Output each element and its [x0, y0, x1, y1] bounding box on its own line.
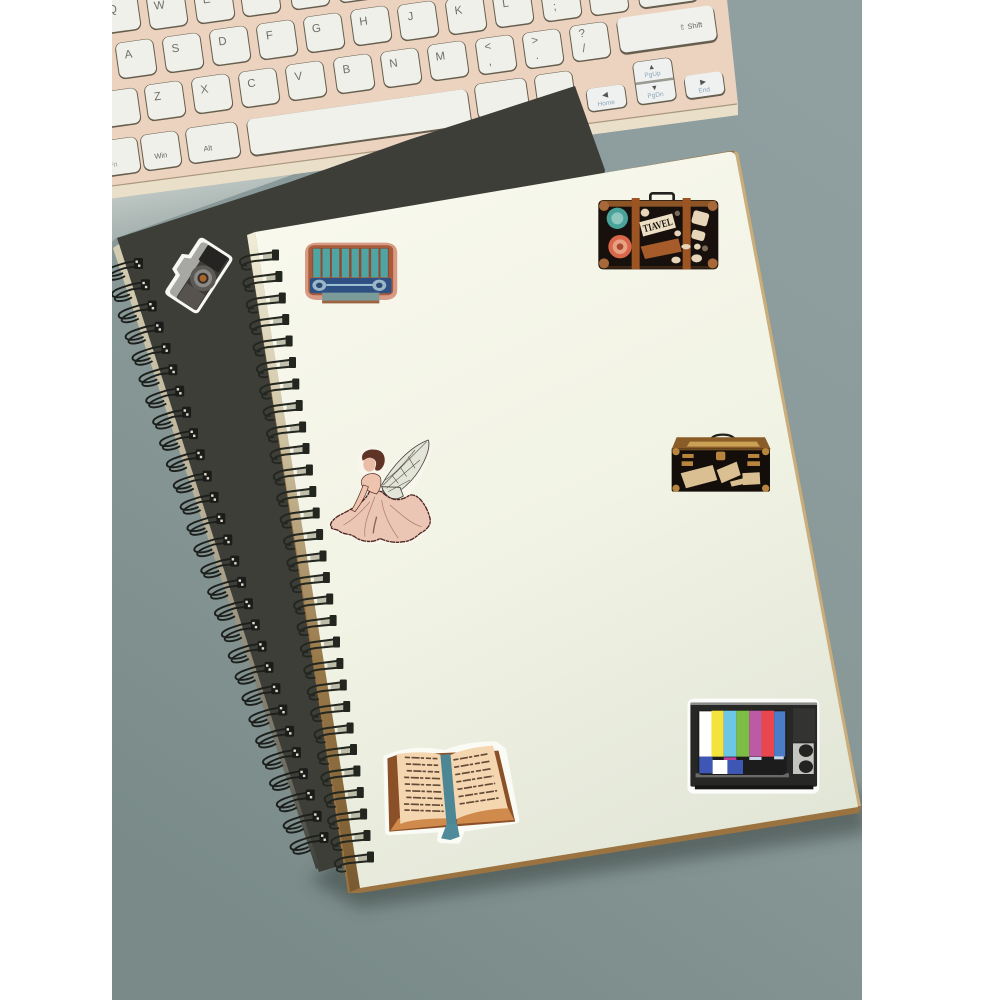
key row Z to slash: M: [435, 50, 446, 64]
key row A to L: S: [171, 42, 180, 55]
key row Z to slash: >: [531, 35, 539, 47]
tv speaker and knobs: [793, 708, 815, 774]
right spiral binding: [240, 250, 374, 872]
arrow keys: Home: [597, 99, 616, 108]
shadow under notebooks: [310, 790, 870, 908]
key row Z to slash: ?: [578, 28, 586, 40]
bottom key row: Fn: [108, 159, 118, 170]
dark back notebook: [105, 86, 605, 872]
book pages: [397, 752, 447, 824]
key row Z to slash: <: [484, 41, 492, 53]
fairy head and hair: [363, 457, 375, 472]
key row Z to slash: N: [389, 57, 398, 71]
key row Z to slash: /: [582, 43, 587, 55]
arrow keys: End: [698, 86, 711, 95]
book ribbon: [440, 754, 457, 825]
key row A to L: G: [311, 22, 322, 36]
key row A to L: ;: [552, 1, 557, 13]
key row A to L: H: [359, 15, 368, 29]
key row A to L: K: [454, 4, 463, 17]
arrow keys: PgDn: [647, 91, 664, 100]
key row Z to slash: .: [535, 50, 539, 62]
key row Z to slash: B: [342, 63, 351, 76]
fairy sticker backing: [329, 438, 433, 545]
key row Z to slash: X: [200, 83, 209, 96]
key row Z to slash: [98, 21, 612, 129]
sticker: black trunk: [672, 435, 771, 492]
bottom key row: Win: [154, 150, 168, 161]
bottom key row: Alt: [203, 143, 214, 153]
travel label: TIAVEL: [642, 217, 674, 235]
key row Z to slash: ,: [488, 56, 492, 68]
suitcase handle: [650, 193, 674, 202]
sticker: camera: [165, 238, 232, 314]
key row A to L: [114, 0, 699, 80]
keyboard: [98, 0, 738, 200]
bottom key row: [98, 70, 577, 178]
shift key: ⇧ Shift: [678, 20, 704, 32]
sticker: travel suitcase: [598, 193, 718, 269]
sticker: retro radio: [305, 243, 397, 303]
arrow keys: ◀: [602, 90, 610, 100]
arrow keys: ▲: [647, 62, 656, 72]
arrow keys: ▶: [700, 77, 708, 87]
key row A to L: A: [124, 48, 133, 61]
key row Z to slash: C: [247, 77, 256, 91]
sticker: television: [687, 699, 819, 794]
arrow keys: [585, 57, 726, 113]
key row A to L: D: [218, 35, 227, 49]
key row Z to slash: Z: [153, 91, 162, 103]
sticker: open book: [387, 745, 515, 840]
key row A to L: F: [265, 30, 274, 42]
radio grille: [313, 249, 388, 277]
arrow keys: ▼: [650, 83, 659, 93]
key row A to L: J: [407, 11, 414, 23]
key row Z to slash: V: [294, 70, 303, 83]
shift key: [615, 5, 719, 56]
white front notebook: [247, 151, 861, 893]
sticker: fairy: [329, 438, 433, 545]
left spiral binding: [105, 258, 328, 854]
fairy wings: [382, 440, 429, 494]
fairy bodice and arm: [362, 474, 381, 494]
notebook page: [255, 152, 858, 888]
book text lines: [404, 754, 499, 811]
page stack edge: [247, 151, 861, 893]
keyboard: Q: [107, 3, 118, 17]
arrow keys: PgUp: [644, 70, 662, 79]
left page edge strip: [113, 244, 320, 869]
fairy dress: [331, 490, 430, 542]
grey desk background: [112, 0, 862, 1000]
tv screen: [698, 710, 787, 775]
